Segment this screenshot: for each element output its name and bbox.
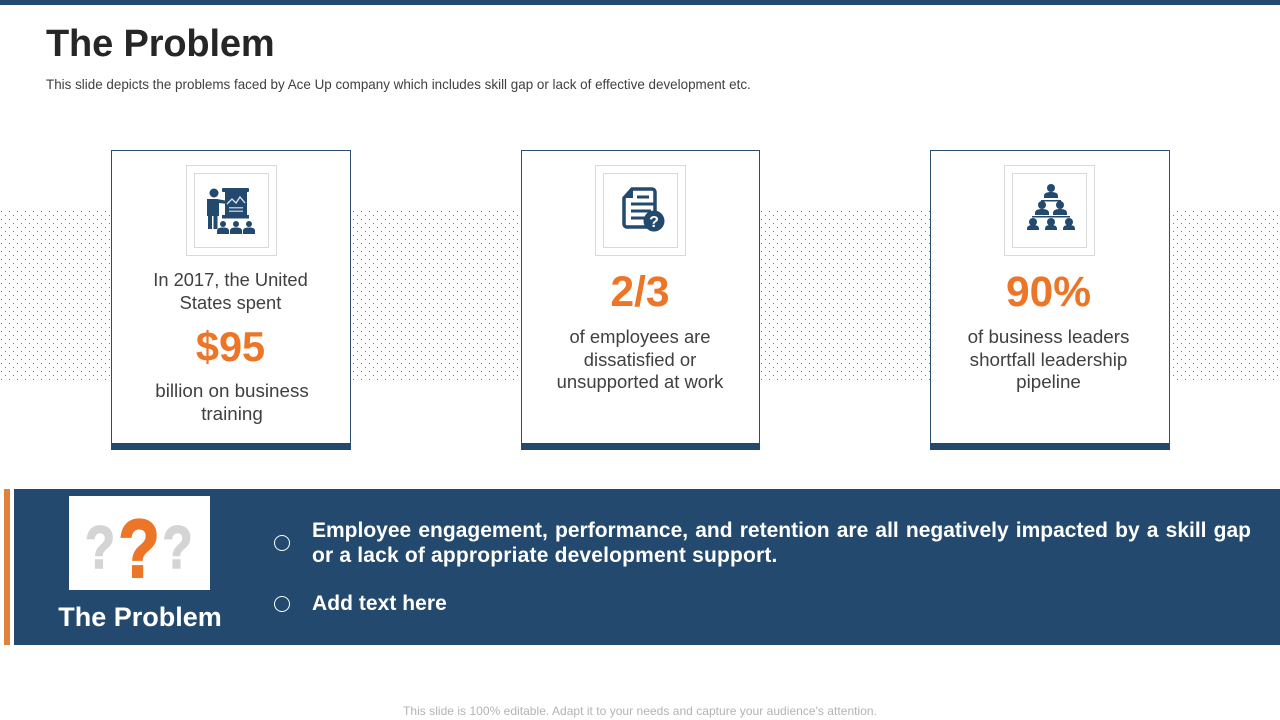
bullet one	[274, 535, 290, 551]
title: The Problem	[46, 23, 275, 65]
accent bar	[521, 443, 760, 450]
text: bullet two: Add text here	[312, 592, 447, 615]
number: $95: $95	[196, 323, 265, 370]
icon: question marks: ?	[85, 513, 115, 581]
text: bullet one	[312, 519, 1251, 567]
icon: hierarchy of people	[1004, 165, 1095, 256]
text: In 2017: States spent	[180, 292, 281, 313]
text: billion on business training: training	[201, 403, 263, 424]
text: business leaders: shortfall leadership	[970, 348, 1127, 370]
text: bullet one: Employee engagement, performance, and retention are all negatively impacted by a skill gap	[312, 519, 1251, 542]
panel: business leaders	[930, 150, 1170, 450]
dotted background band	[1, 211, 1278, 380]
icon: document with question mark	[595, 165, 686, 256]
panel: training spend	[111, 150, 351, 450]
panel: the problem banner	[4, 489, 1280, 645]
icon: question marks: ?	[118, 503, 160, 596]
number: 2/3: 2/3	[610, 269, 670, 316]
text: employees dissatisfied	[557, 326, 724, 392]
footer note: This slide is 100% editable. Adapt it to your needs and capture your audience's attention.	[403, 704, 877, 718]
top band	[0, 0, 1280, 5]
text: employees dissatisfied: of employees are	[569, 326, 711, 347]
text: bullet one: or a lack of appropriate development support.	[312, 544, 778, 567]
text: In 2017: In 2017, the United	[153, 269, 308, 290]
banner heading: The Problem	[58, 602, 222, 632]
text: employees dissatisfied: dissatisfied or	[584, 348, 696, 370]
banner background	[14, 489, 1280, 645]
text: business leaders	[968, 326, 1129, 392]
text: business leaders: of business leaders	[968, 326, 1129, 347]
icon: question marks: ?	[162, 513, 193, 581]
icon: question marks	[69, 496, 210, 590]
subtitle: This slide depicts the problems faced by Ace Up company which includes skill gap or lack of effective development etc.	[46, 77, 751, 92]
bullet two	[274, 596, 290, 612]
icon: presenter at board	[186, 165, 277, 256]
text: billion on business training	[155, 380, 309, 424]
text: In 2017	[153, 269, 308, 313]
accent bar	[930, 443, 1170, 450]
text: business leaders: pipeline	[1016, 371, 1081, 392]
text: billion on business training: billion on business	[155, 380, 309, 401]
orange accent stripe	[4, 489, 10, 645]
number: 90%: 90%	[1006, 269, 1091, 316]
panel: dissatisfied employees	[521, 150, 760, 450]
icon: document with question mark: ?	[649, 214, 659, 231]
text: employees dissatisfied: unsupported at work	[557, 371, 723, 392]
accent bar	[111, 443, 351, 450]
